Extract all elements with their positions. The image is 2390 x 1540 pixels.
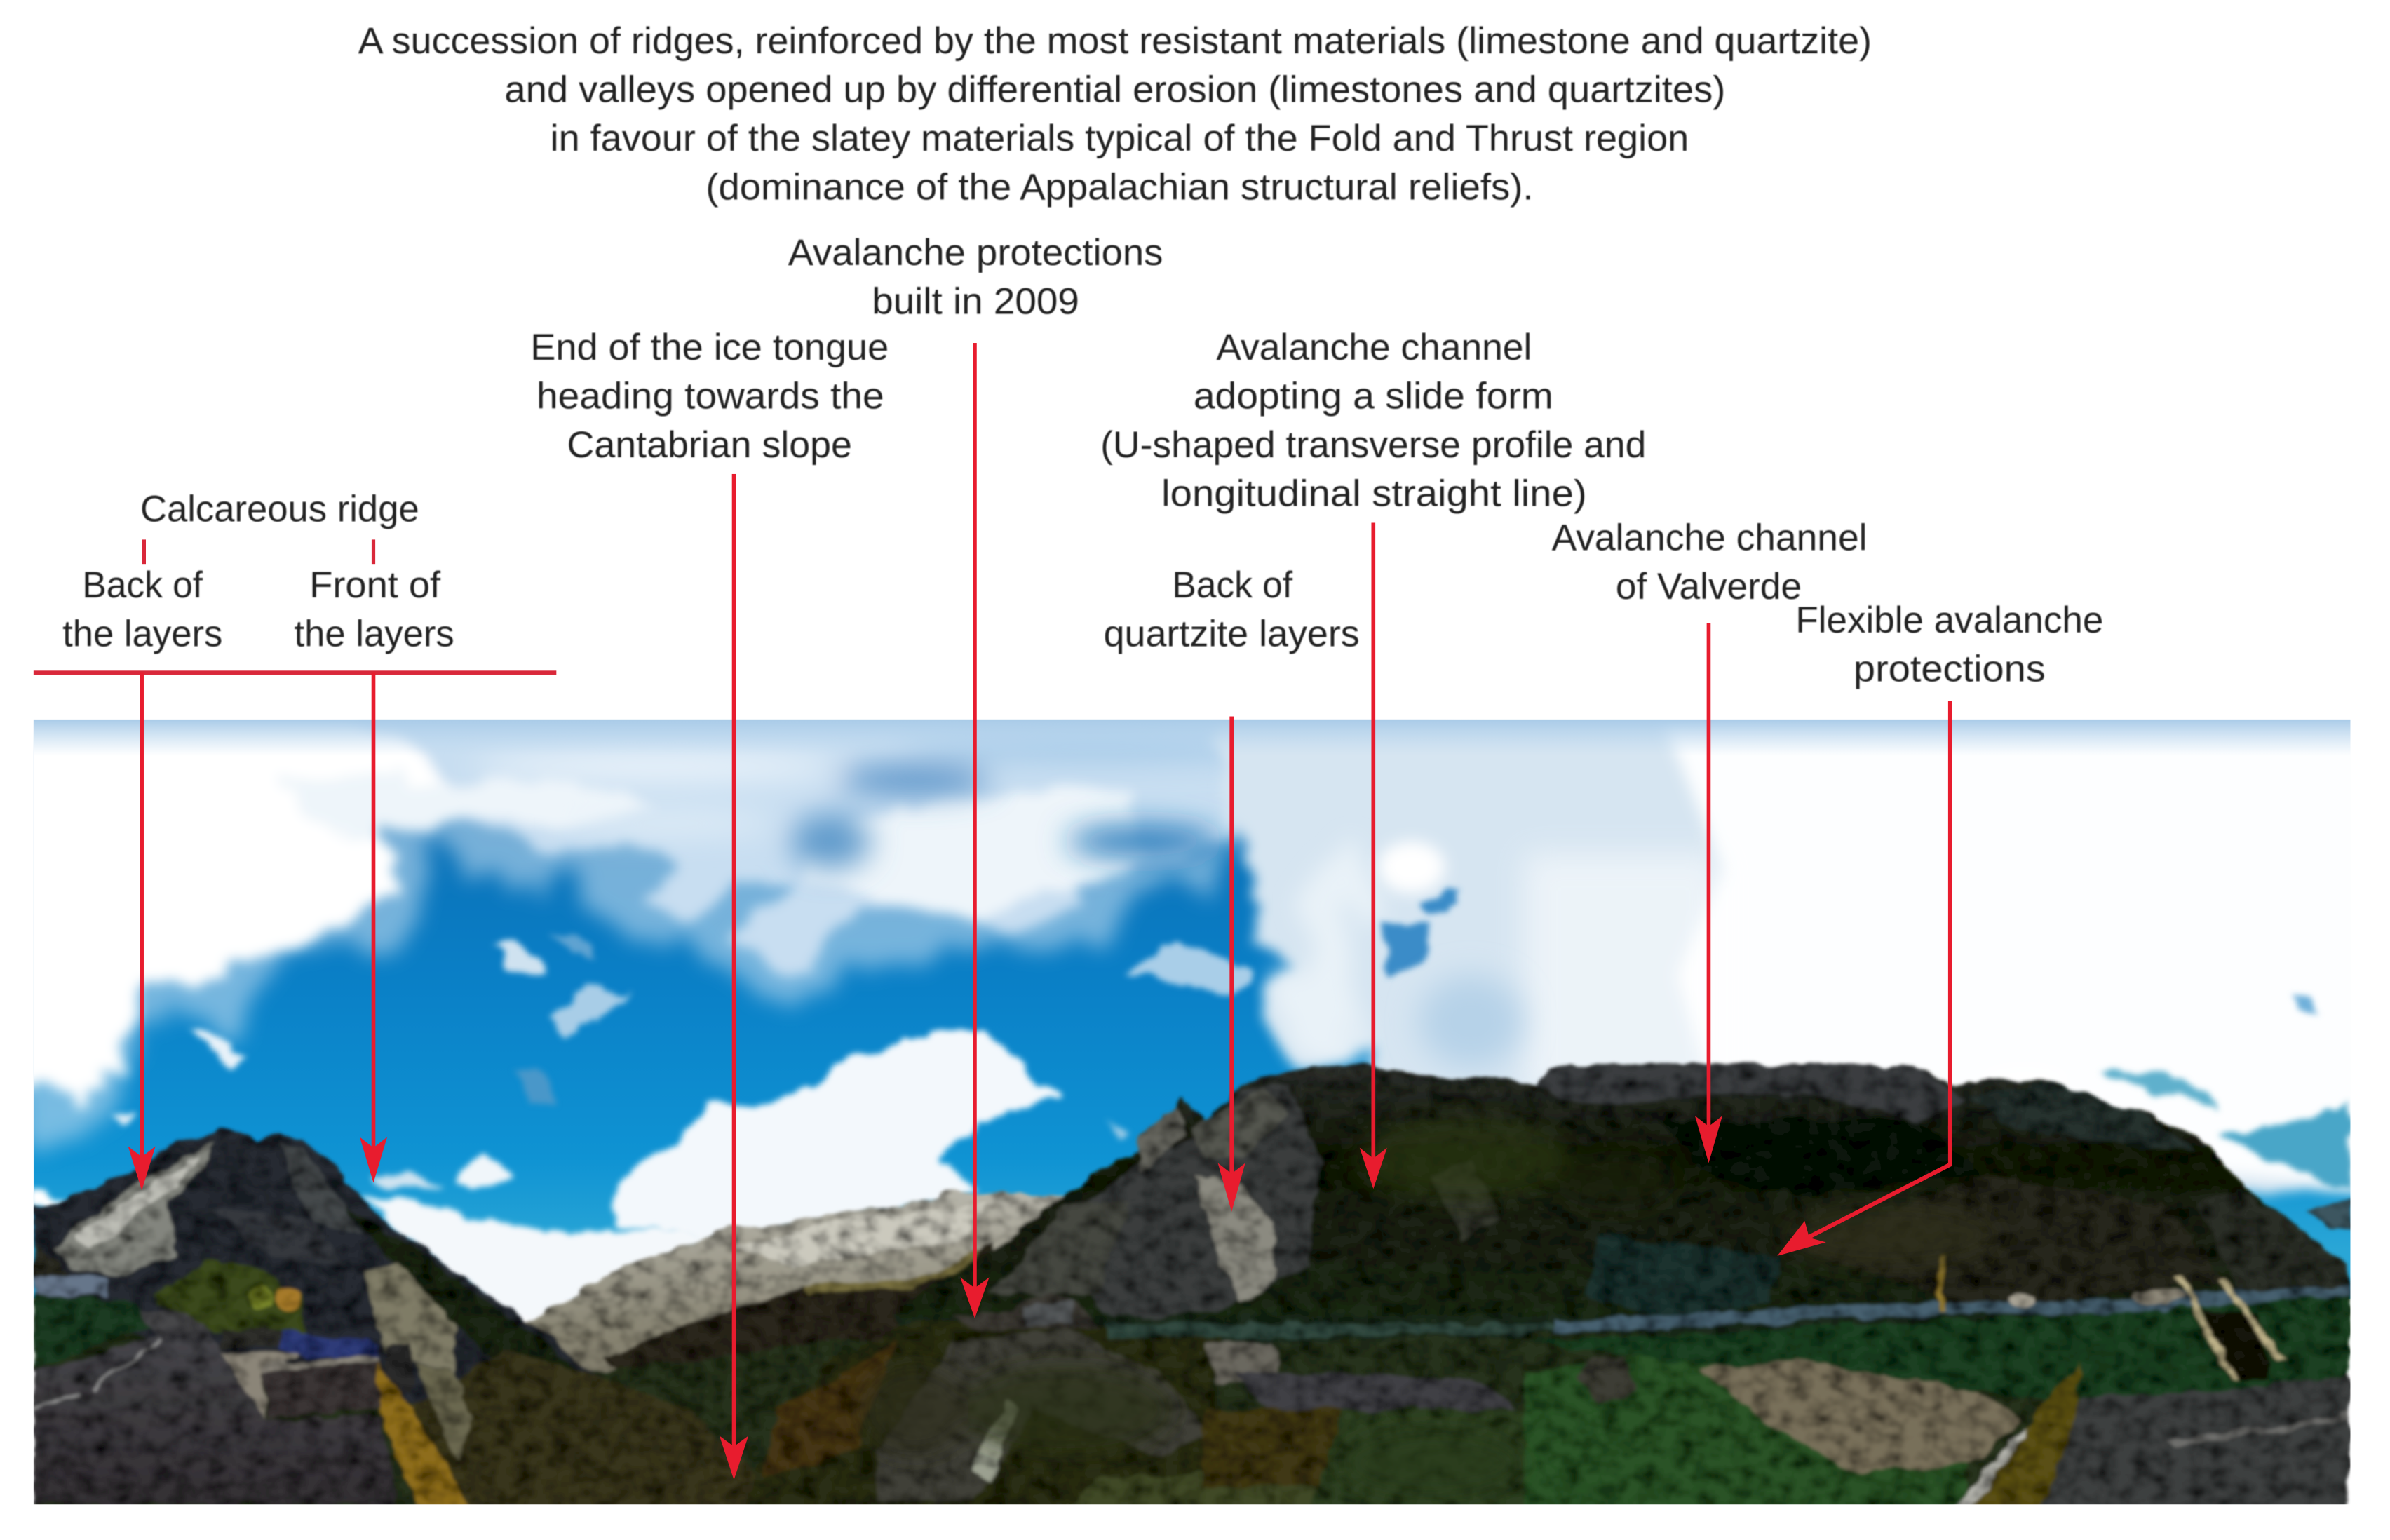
label: flexible avalanche protections: [1795, 600, 2103, 690]
right bright sky: [1220, 686, 2378, 1189]
staircase: [2177, 1277, 2283, 1379]
label: back of quartzite layers: Back of: [1172, 565, 1292, 606]
rock slope right of fence: [414, 1364, 473, 1464]
label: avalanche channel slide form: Avalanche channel: [1216, 327, 1532, 368]
label: avalanche protections built in 2009: Avalanche protections: [788, 232, 1163, 273]
avalanche shelter structures and guard rail: [952, 1253, 2350, 1338]
label: avalanche channel slide form: (U-shaped transverse profile and: [1100, 424, 1646, 466]
left wooden fence: [378, 1360, 468, 1509]
label: avalanche protections built in 2009: [788, 232, 1163, 323]
title text block: A succession of ridges, reinforced by the most resistant materials (limestone and quartzite): [358, 20, 1872, 62]
land mass: [34, 1062, 2350, 1524]
left peak: [34, 1128, 640, 1417]
stone platform and walls: [220, 1328, 412, 1419]
label: flexible avalanche protections: protections: [1854, 649, 2046, 690]
arrow: back of the layers: [128, 672, 156, 1190]
blue breaks within the clouds: [473, 735, 1295, 869]
label: avalanche channel slide form: adopting a slide form: [1194, 375, 1553, 417]
label: avalanche channel of Valverde: Avalanche channel: [1552, 518, 1867, 559]
panel: panoramic mountain photograph: [0, 686, 2378, 1524]
label: avalanche channel slide form: [1100, 327, 1646, 515]
label: end of the ice tongue: heading towards the: [536, 375, 884, 417]
left road: [34, 1309, 396, 1504]
label: front of the layers: [294, 565, 454, 655]
white cloud strip under left peak: [358, 1196, 731, 1326]
label: avalanche channel of Valverde: of Valverde: [1616, 566, 1802, 607]
bushes foreground left: [412, 1349, 755, 1509]
road markings: [34, 1339, 160, 1410]
big cumulus cloud low centre: [617, 1029, 1061, 1238]
label: end of the ice tongue: Cantabrian slope: [567, 424, 852, 466]
arrow: calcareous ridge horizontal bracket: [34, 670, 556, 675]
title text block: [358, 20, 1872, 208]
top light-blue band: [34, 720, 2350, 756]
cloud cover upper sky: [34, 720, 1243, 1116]
label: front of the layers: Front of: [309, 565, 440, 606]
soft colour variation over slopes: [860, 1116, 1997, 1497]
label: avalanche channel slide form: longitudinal straight line): [1161, 473, 1587, 515]
left verge: [34, 1295, 151, 1365]
foreground slope and grass: [731, 1295, 2350, 1509]
label: flexible avalanche protections: Flexible avalanche: [1795, 600, 2103, 641]
arrow: front of the layers: [360, 672, 387, 1183]
label: end of the ice tongue: [530, 327, 889, 466]
title text block: (dominance of the Appalachian structural reliefs).: [705, 167, 1534, 208]
title text block: in favour of the slatey materials typical of the Fold and Thrust region: [551, 118, 1689, 159]
tick: calcareous ridge to front of layers: [372, 539, 375, 564]
right wooden fence: [1952, 1361, 2079, 1509]
right road: [2041, 1373, 2350, 1509]
label: back of quartzite layers: [1104, 565, 1360, 655]
label: back of the layers: the layers: [62, 614, 222, 655]
label: back of the layers: [62, 565, 222, 655]
label: front of the layers: the layers: [294, 614, 454, 655]
tick: calcareous ridge to back of layers: [142, 539, 146, 564]
solid foreground base: [34, 1288, 2350, 1524]
label: back of quartzite layers: quartzite layers: [1104, 614, 1360, 655]
arrow: avalanche protections built in 2009: [960, 343, 990, 1318]
arrow: avalanche channel slide form: [1360, 522, 1387, 1189]
label: end of the ice tongue: End of the ice tongue: [530, 327, 889, 368]
label: calcareous ridge: Calcareous ridge: [140, 488, 419, 529]
arrow: back of quartzite layers: [1218, 717, 1245, 1212]
right massif: [891, 1062, 2350, 1349]
feathered cloud halo: [34, 811, 1253, 1162]
arrow: end of the ice tongue: [720, 474, 748, 1480]
title text block: and valleys opened up by differential erosion (limestones and quartzites): [504, 69, 1725, 111]
label: avalanche protections built in 2009: built in 2009: [872, 281, 1079, 323]
label: back of the layers: Back of: [82, 565, 203, 606]
far valley mountain: [506, 1192, 1067, 1410]
small clouds: [34, 933, 1257, 1212]
arrow: flexible avalanche protections: [1777, 701, 1950, 1256]
arrow: avalanche channel of Valverde: [1695, 623, 1722, 1163]
sky base: [34, 720, 2350, 1299]
label: avalanche channel of Valverde: [1552, 518, 1867, 607]
right horizon sky patches: [1982, 1067, 2350, 1189]
